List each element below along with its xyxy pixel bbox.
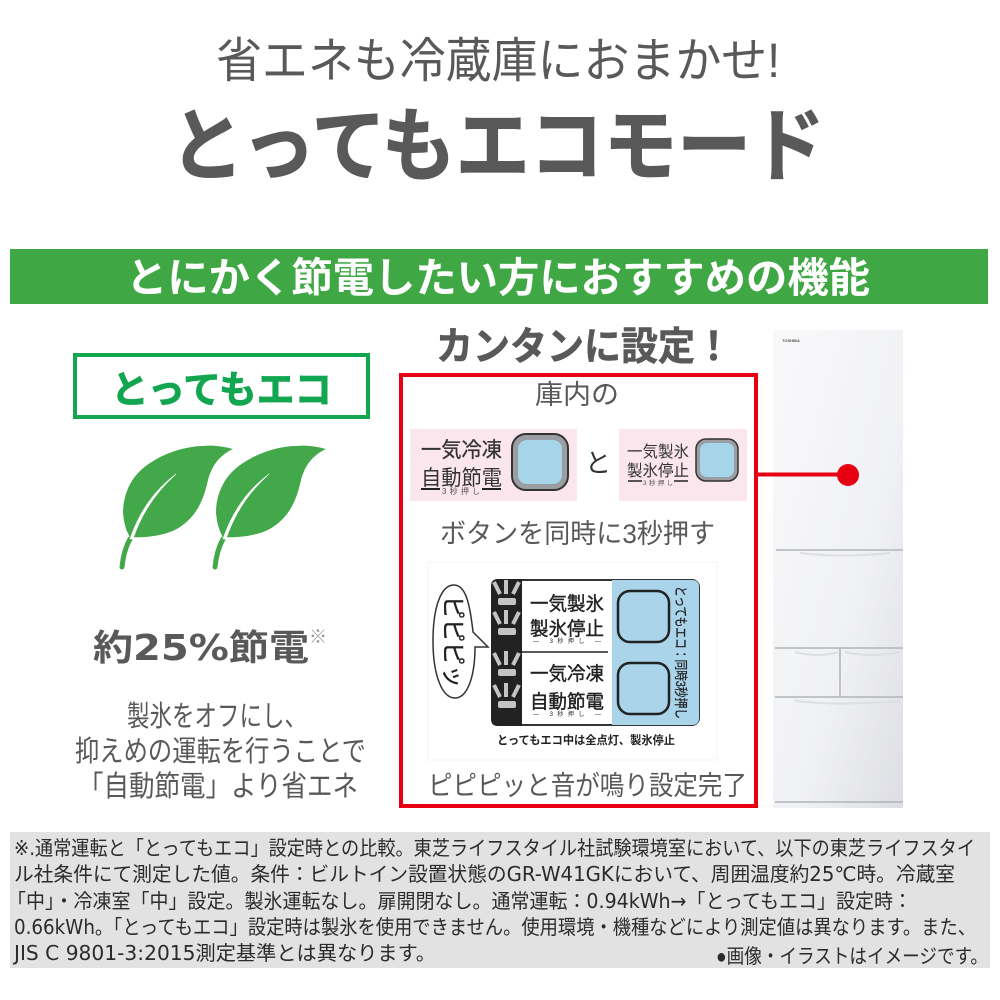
icon: two leaves <box>122 446 326 567</box>
button: quick ice: 一気製氷 <box>627 443 689 461</box>
control panel illustration: 一気製氷 <box>530 593 604 615</box>
heading: easy setup: カンタンに設定！ <box>436 326 732 369</box>
footnote: ル社条件にて測定した値。条件：ビルトイン設置状態のGR-W41GKにおいて、周囲温度約25℃時。冷蔵室 <box>14 862 955 886</box>
button: quick ice: 製氷停止 <box>627 462 689 480</box>
footnote: 「中」・冷凍室「中」設定。製氷運転なし。扉開閉なし。通常運転：0.94kWh→「とってもエコ」設定時： <box>7 889 912 913</box>
green banner: とにかく節電したい方におすすめの機能 <box>126 255 870 301</box>
button: quick freeze: 一気冷凍 <box>421 439 502 462</box>
control panel illustration: 一気冷凍 <box>530 663 604 685</box>
control panel illustration: ― 3秒押し ― <box>533 637 601 645</box>
control panel illustration <box>428 562 717 760</box>
subtitle: 省エネも冷蔵庫におまかせ! <box>216 35 780 88</box>
button: quick freeze: 自動節電 <box>421 467 502 490</box>
connector: と: と <box>585 448 611 478</box>
description: 「自動節電」より省エネ <box>78 770 358 803</box>
saving figure: ※ <box>309 627 327 647</box>
description: 抑えめの運転を行うことで <box>75 735 366 768</box>
control panel illustration: 自動節電 <box>530 691 604 713</box>
control panel illustration: 製氷停止 <box>530 618 604 640</box>
callout line and dot <box>757 464 859 486</box>
control panel illustration: ピピピッ <box>439 596 466 688</box>
button: quick freeze: 3秒押し <box>442 486 480 496</box>
description: 製氷をオフにし、 <box>127 700 307 733</box>
control panel illustration: とってもエコ中は全点灯、製氷停止 <box>497 733 675 747</box>
control panel illustration: ― 3秒押し ― <box>533 710 601 718</box>
label: in-fridge: 庫内の <box>535 380 619 410</box>
button: quick ice <box>619 429 747 501</box>
saving figure: 約25%節電 <box>93 628 309 669</box>
badge: とってもエコ: とってもエコ <box>111 370 332 412</box>
green banner <box>10 249 988 304</box>
panel: setup instructions <box>401 375 756 806</box>
instruction: complete: ピピピッと音が鳴り設定完了 <box>428 771 747 801</box>
panel: eco mode summary <box>75 355 368 803</box>
footnote: JIS C 9801-3:2015測定基準とは異なります。 <box>12 941 436 965</box>
main title: とってもエコモード <box>170 102 825 191</box>
refrigerator: TOSHIBA <box>782 338 800 343</box>
button: quick freeze <box>410 429 577 501</box>
instruction: press: ボタンを同時に3秒押す <box>440 519 715 549</box>
control panel illustration: とってもエコ：同時3秒押し <box>673 586 688 719</box>
footnote <box>7 832 990 968</box>
badge: とってもエコ <box>75 355 368 417</box>
refrigerator <box>773 330 903 808</box>
button: quick ice: 3秒押し <box>643 478 673 487</box>
description <box>75 700 366 803</box>
